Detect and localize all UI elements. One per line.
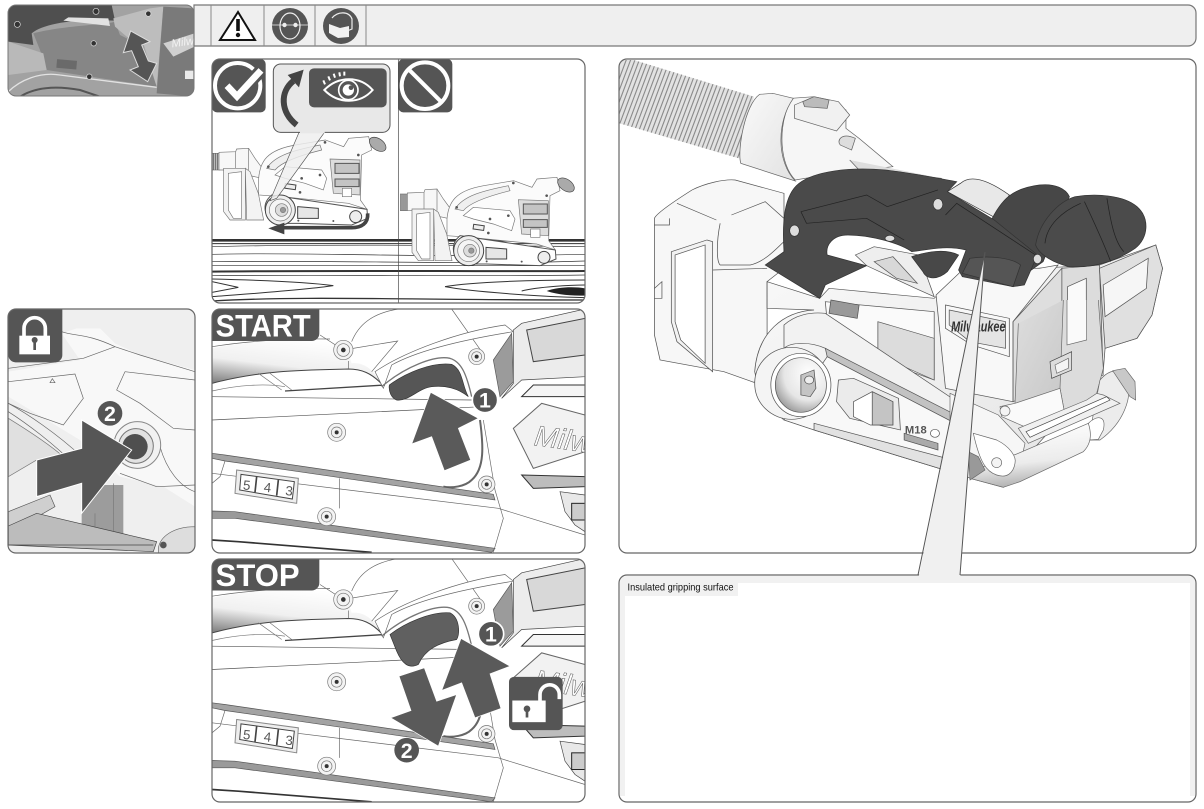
arrow: belt direction [268, 213, 368, 234]
icon: prohibited [398, 59, 452, 112]
icon: locked padlock [8, 309, 62, 362]
icon: correct check [212, 59, 266, 112]
logo: Milw [532, 665, 596, 705]
icon: warning triangle [220, 12, 255, 40]
step badge 2: 2 [104, 402, 116, 426]
arrow: release up [442, 638, 510, 718]
description label: Insulated gripping surface [628, 582, 734, 594]
panel: description text [619, 575, 1196, 802]
logo on photo: Milw [171, 35, 196, 50]
icon: dust mask [323, 8, 359, 44]
step badge 1: 1 [485, 622, 497, 646]
dark insulated handle [765, 169, 1146, 298]
step badge 1: 1 [479, 389, 491, 413]
number plate digits [243, 730, 292, 745]
icon: double-headed adjustment arrow [123, 31, 157, 82]
hose [620, 60, 754, 158]
battery pack [654, 180, 784, 382]
wood surface [212, 240, 585, 301]
number plate digits: 5 [242, 727, 251, 743]
lever [389, 364, 468, 400]
panel: STOP [212, 558, 596, 802]
tool markings: Milwaukee [951, 319, 1006, 335]
tool markings [905, 319, 1006, 436]
panel: top-left adjustment photo [8, 5, 196, 97]
arrow: press lever [412, 392, 478, 471]
step badge 2: 2 [401, 739, 413, 763]
hose coupling [740, 93, 942, 181]
tool body [755, 245, 1163, 478]
number plate digits: 3 [285, 483, 294, 499]
number plate digits: 5 [242, 477, 251, 493]
step badge 1 [472, 387, 498, 413]
callout: eye on tool [270, 64, 390, 201]
step badge 2 [394, 738, 419, 763]
tool markings: M18 [905, 425, 927, 436]
number plate digits: 4 [263, 480, 273, 495]
panel: lock button [8, 309, 195, 553]
number plate digits: 3 [285, 733, 294, 748]
tool front end and roller [950, 300, 1136, 487]
number plate digits [243, 480, 292, 496]
logo: Milw [532, 420, 596, 460]
label: STOP: STOP [216, 558, 300, 593]
frame: top-left photo border [8, 5, 194, 96]
icon: eye protection [272, 8, 308, 44]
label background [624, 581, 738, 596]
callout wedge [918, 252, 985, 580]
step badge 1 [478, 621, 504, 646]
number plate digits: 4 [263, 729, 273, 745]
arrow: push lock button [37, 420, 132, 513]
panel: correct and incorrect use [212, 59, 585, 303]
panel: main tool illustration [615, 55, 1196, 553]
lever [390, 613, 459, 666]
icon: unlocked padlock [509, 677, 563, 730]
step badge 2 [98, 401, 122, 426]
header bar with safety icons [194, 5, 1196, 46]
label: START: START [216, 309, 311, 344]
divider [398, 60, 399, 302]
lock button [114, 422, 161, 468]
panel: START [212, 309, 596, 553]
arrow: release down [391, 668, 457, 746]
